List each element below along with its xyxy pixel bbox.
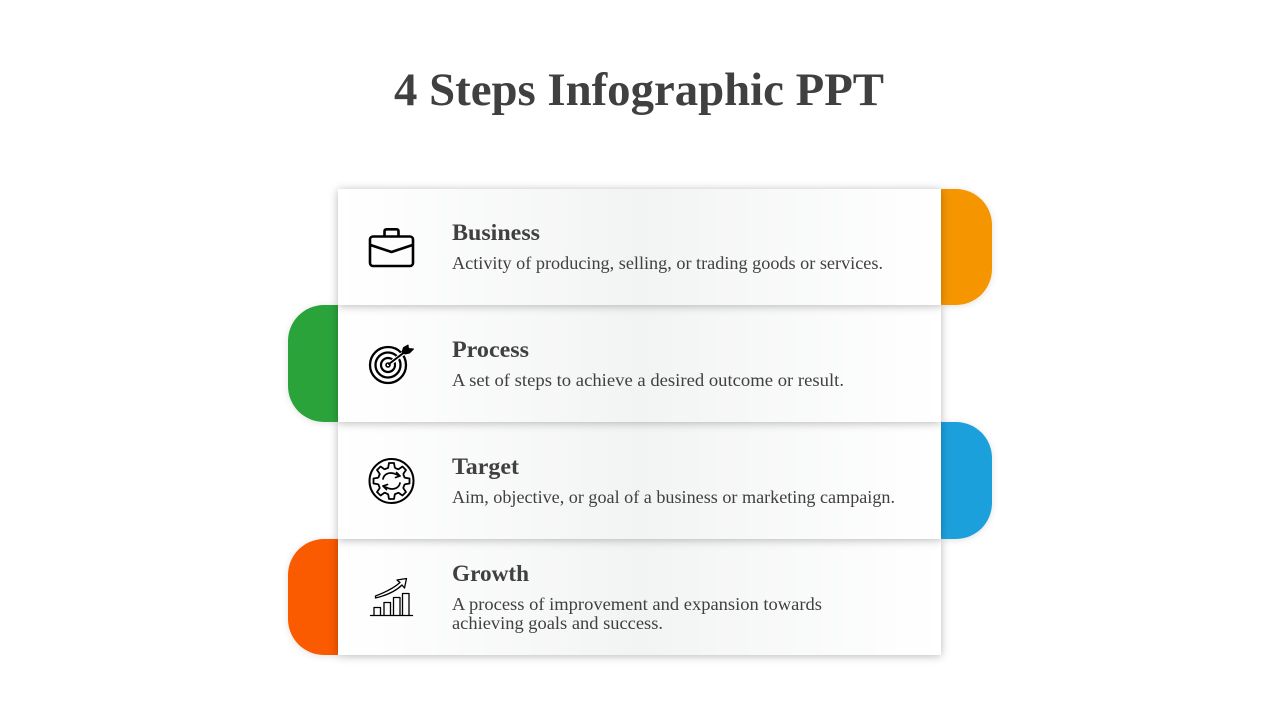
panel: step 4 growth xyxy=(288,539,941,655)
panel: step 2 process xyxy=(288,305,941,422)
tab: orange-red left xyxy=(288,539,338,655)
tab: green left xyxy=(288,305,338,422)
description: target: Aim, objective, or goal of a business or marketing campaign. xyxy=(452,487,895,507)
card: target background xyxy=(338,422,941,539)
tab: orange right xyxy=(941,189,992,305)
heading: business: Business xyxy=(452,220,540,245)
description: growth: A process of improvement and expansion towards xyxy=(452,594,822,614)
description: business: Activity of producing, selling, or trading goods or services. xyxy=(452,253,883,273)
title: 4 Steps Infographic PPT xyxy=(394,64,884,116)
panel: step 3 target xyxy=(338,422,992,539)
tab: blue right xyxy=(941,422,992,539)
icon: gear with arrows xyxy=(370,459,414,503)
description: growth xyxy=(452,594,822,633)
card: growth background xyxy=(338,539,941,655)
icon: growth chart xyxy=(370,578,412,616)
heading: target: Target xyxy=(452,454,519,479)
panel: step 1 business xyxy=(338,189,992,305)
description: process: A set of steps to achieve a desired outcome or result. xyxy=(452,370,844,390)
card: business background xyxy=(338,189,941,305)
heading: process: Process xyxy=(452,337,529,362)
description: growth: achieving goals and success. xyxy=(452,613,663,633)
icon: target with arrow xyxy=(370,345,414,383)
heading: growth: Growth xyxy=(452,561,529,586)
card: process background xyxy=(338,305,941,422)
icon: briefcase xyxy=(370,229,413,266)
